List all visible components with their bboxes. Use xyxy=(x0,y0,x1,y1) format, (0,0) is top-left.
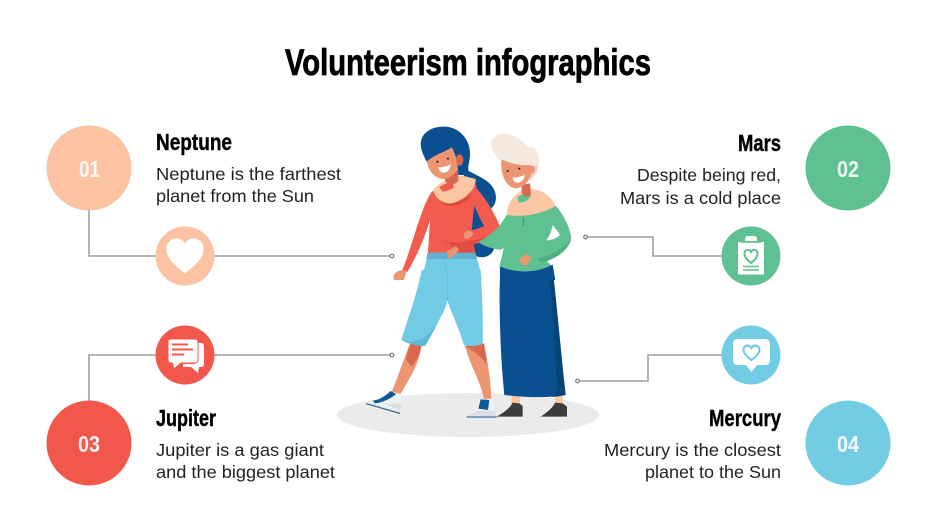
text: Mercury description: planet to the Sun xyxy=(645,462,781,482)
text: Jupiter description: Jupiter is a gas giant xyxy=(156,440,324,460)
number badge 02 xyxy=(806,126,890,210)
icon: chat bubbles xyxy=(156,326,214,384)
panel: Mars xyxy=(620,126,890,286)
panel: Neptune xyxy=(46,126,341,286)
connector: Mercury xyxy=(576,355,723,383)
icon: heart xyxy=(156,226,214,286)
icon: speech bubble with heart xyxy=(722,326,780,384)
text: Jupiter description xyxy=(156,440,335,482)
number badge 04 xyxy=(806,400,890,486)
text: Mercury description xyxy=(604,440,781,482)
text: Neptune description: planet from the Sun xyxy=(156,186,314,206)
ground shadow xyxy=(337,393,599,437)
heading: Jupiter: Jupiter xyxy=(156,405,216,431)
connector: Mars xyxy=(584,235,723,256)
number badge 04: 04 xyxy=(837,431,859,457)
heading: Mars: Mars xyxy=(738,130,781,156)
number badge 01: 01 xyxy=(79,156,100,182)
number badge 03 xyxy=(46,400,132,486)
text: Mercury description: Mercury is the closest xyxy=(604,440,781,460)
figure: older woman upper body xyxy=(478,134,571,280)
panel: Mercury xyxy=(604,326,890,486)
text: Mars description: Despite being red, xyxy=(637,165,781,185)
number badge 01 xyxy=(46,126,132,210)
figure: older woman lower body xyxy=(497,270,567,417)
number badge 03: 03 xyxy=(78,431,100,457)
text: Mars description: Mars is a cold place xyxy=(620,188,781,208)
heading: Neptune: Neptune xyxy=(156,129,232,155)
illustration: two women walking xyxy=(337,127,599,437)
number badge 02: 02 xyxy=(837,156,859,182)
figure: younger woman hair back xyxy=(463,167,496,257)
connector: Jupiter xyxy=(89,353,394,402)
figure: younger woman lower body xyxy=(366,270,497,417)
text: Mars description xyxy=(620,165,781,208)
text: Jupiter description: and the biggest planet xyxy=(156,462,335,482)
panel: Jupiter xyxy=(46,326,335,486)
figure: younger woman upper body xyxy=(393,127,500,280)
text: Neptune description: Neptune is the farthest xyxy=(156,164,341,184)
connector: Neptune xyxy=(89,208,394,258)
title: Volunteerism infographics xyxy=(285,42,651,83)
text: Neptune description xyxy=(156,164,341,206)
icon: clipboard with heart xyxy=(722,226,780,286)
heading: Mercury: Mercury xyxy=(709,405,781,431)
